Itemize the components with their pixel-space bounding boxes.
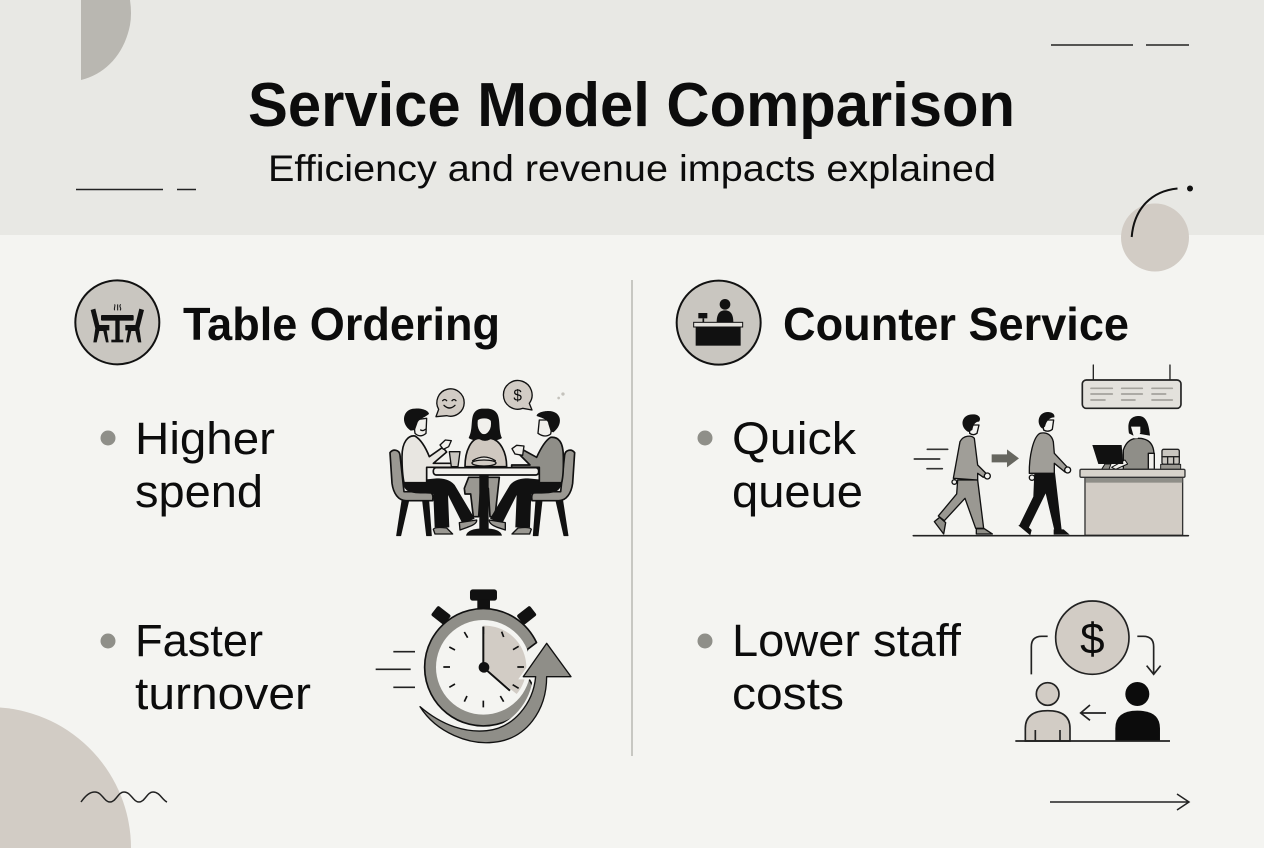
chair: right xyxy=(532,450,575,536)
ground line xyxy=(1015,738,1170,743)
bullet: higher spend: Higher xyxy=(135,413,275,464)
flow arrows xyxy=(1031,636,1161,720)
decoration: circle with arc and dot xyxy=(1121,186,1193,272)
staff figure: dark xyxy=(1115,682,1160,741)
staff figure: light xyxy=(1025,683,1070,741)
decoration: bottom-right arrow xyxy=(1050,794,1189,810)
bullet: higher spend: spend xyxy=(135,466,263,517)
title: Service Model Comparison xyxy=(248,71,1015,140)
bullet: faster turnover: Faster xyxy=(135,615,263,666)
watch face xyxy=(436,620,531,715)
chair: left xyxy=(390,450,433,536)
panel: counter service xyxy=(677,281,1188,741)
crown and buttons xyxy=(431,589,537,625)
bullet: lower staff costs xyxy=(698,615,962,719)
speech bubble: dollar: $ xyxy=(513,387,522,404)
decoration: bottom-left circle xyxy=(0,708,131,848)
header band xyxy=(0,0,1264,235)
circular arrow xyxy=(420,643,571,743)
illustration: stopwatch with arrow xyxy=(376,589,571,743)
speed lines xyxy=(376,652,415,687)
dollar coin: $ xyxy=(1080,615,1105,664)
center divider xyxy=(631,280,633,756)
bullet: lower staff costs: costs xyxy=(732,668,844,719)
stack of trays xyxy=(1161,449,1181,469)
bullet: higher spend xyxy=(100,413,275,517)
watch ring xyxy=(425,609,536,726)
decoration: left header lines xyxy=(76,188,196,190)
direction arrow xyxy=(992,449,1019,467)
walking person: grey xyxy=(934,414,992,534)
icon: table and chairs xyxy=(75,280,159,364)
counter xyxy=(1080,469,1185,535)
woman at the table xyxy=(464,409,507,517)
bullet: quick queue: queue xyxy=(732,466,863,517)
speech bubble: dollar xyxy=(503,381,532,410)
glass xyxy=(449,452,460,467)
ticks and hands xyxy=(443,627,524,707)
menu sign xyxy=(1082,365,1181,408)
illustration: queue at counter xyxy=(913,365,1188,536)
bullet: faster turnover xyxy=(100,615,311,719)
bullet: faster turnover: turnover xyxy=(135,668,311,719)
speed lines xyxy=(914,449,948,469)
cash monitor xyxy=(1092,445,1123,469)
bullet: lower staff costs: Lower staff xyxy=(732,615,962,666)
illustration: cost flow between staff xyxy=(1015,601,1170,741)
decoration: squiggle xyxy=(81,792,167,802)
illustration: diners talking at a table xyxy=(390,381,575,536)
icon: person at counter xyxy=(677,281,761,365)
bullet: quick queue: Quick xyxy=(732,413,857,464)
heading: table ordering: Table Ordering xyxy=(183,298,500,350)
cashier xyxy=(1112,416,1154,469)
dollar coin xyxy=(1056,601,1129,674)
man at left xyxy=(402,408,477,534)
walking person: black trousers xyxy=(1018,412,1071,535)
subtitle: Efficiency and revenue impacts explained xyxy=(268,147,996,189)
decoration: top-left half circle xyxy=(81,0,131,80)
panel: table ordering xyxy=(75,280,575,743)
heading: counter service: Counter Service xyxy=(783,298,1129,350)
floor line xyxy=(913,533,1188,538)
speech bubble: smile xyxy=(436,389,464,417)
man at right xyxy=(489,411,563,534)
table xyxy=(433,468,539,536)
bullet: quick queue xyxy=(698,413,863,517)
decoration: top-right lines xyxy=(1051,44,1189,46)
elapsed time wedge xyxy=(483,626,526,694)
